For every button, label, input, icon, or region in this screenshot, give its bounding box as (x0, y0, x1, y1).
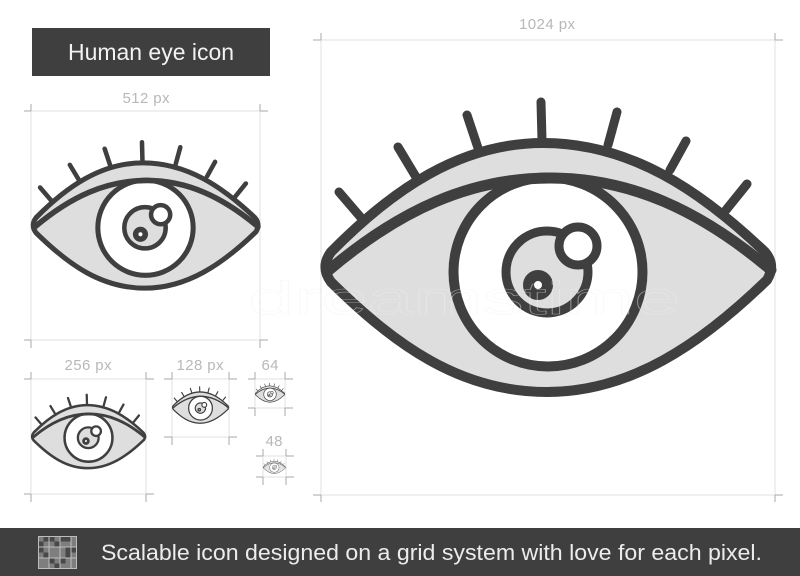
size frame: 48 (256, 449, 294, 485)
size label: 1024 px: 1024 px (519, 16, 576, 33)
icon: human eye 64 px (255, 383, 285, 402)
size label: 128 px: 128 px (176, 357, 224, 374)
size frame: 128 px (164, 372, 237, 445)
size frame: 512 px (24, 104, 268, 348)
size label: 512 px: 512 px (122, 90, 170, 107)
size frame: 256 px (24, 372, 154, 502)
icon: human eye 256 px (32, 395, 145, 468)
size label: 256 px: 256 px (64, 357, 112, 374)
title banner (32, 28, 270, 76)
size label: 48: 48 (266, 433, 282, 450)
size label: 64: 64 (262, 357, 278, 374)
size frame: 1024 px (313, 33, 783, 502)
size frame: 64 (248, 372, 293, 416)
icon: human eye 48 px (263, 459, 286, 474)
footer tagline: Scalable icon designed on a grid system with love for each pixel. (101, 540, 762, 565)
icon: pixel grid (38, 536, 77, 569)
title banner: Human eye icon (68, 39, 234, 65)
watermark: dreamstime (248, 272, 680, 324)
icon: human eye 512 px (33, 142, 258, 288)
footer bar (0, 528, 800, 576)
icon: human eye 1024 px (326, 102, 771, 392)
icon: human eye 128 px (173, 387, 229, 423)
